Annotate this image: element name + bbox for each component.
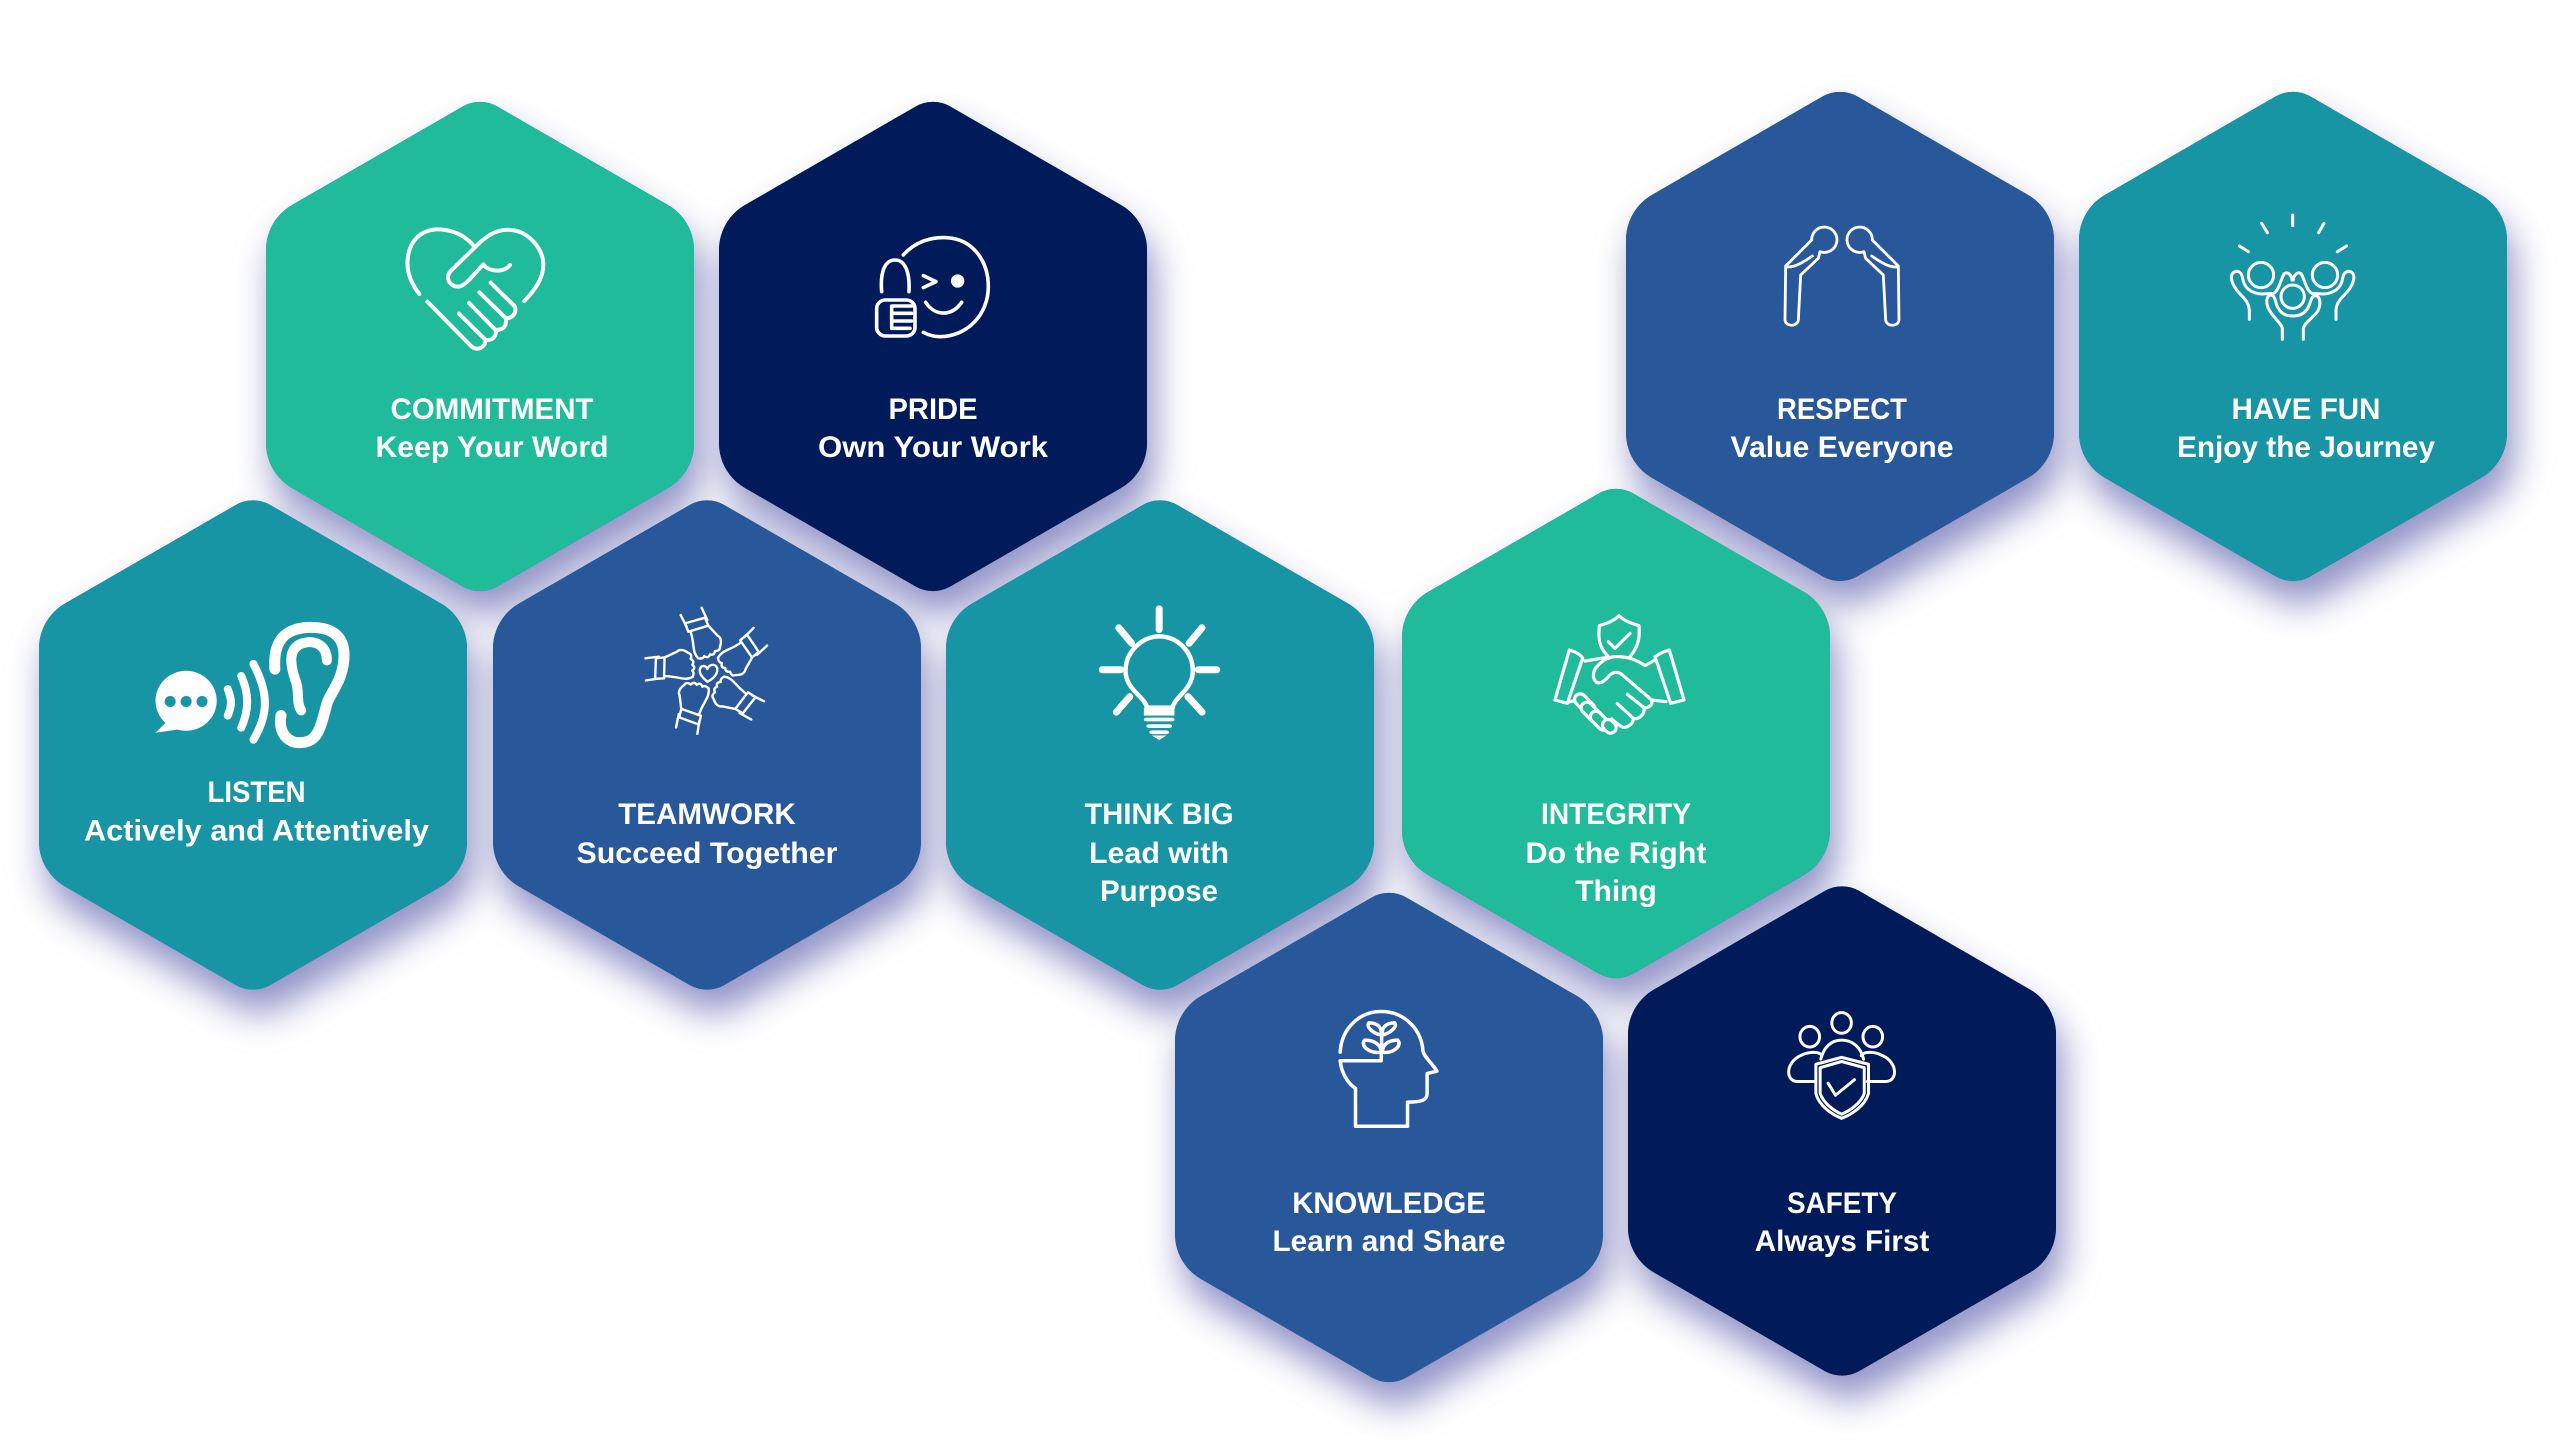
- text: think big: [1084, 798, 1234, 908]
- text: pride: [818, 393, 1048, 464]
- text: integrity: Thing: [1575, 875, 1657, 908]
- text: have fun: Enjoy the Journey: [2177, 431, 2435, 464]
- text: respect: [1730, 393, 1954, 464]
- panel: teamwork: [493, 500, 921, 990]
- icon: five hands around a heart: [639, 608, 773, 740]
- text: knowledge: KNOWLEDGE: [1292, 1187, 1486, 1220]
- text: respect: Value Everyone: [1730, 431, 1954, 464]
- text: knowledge: [1272, 1187, 1506, 1258]
- hexagon: listen: [39, 500, 467, 990]
- text: pride: Own Your Work: [818, 431, 1048, 464]
- icon: cheering people: [2231, 215, 2354, 339]
- hexagon: teamwork: [493, 500, 921, 990]
- panel: integrity: [1402, 489, 1830, 978]
- text: think big: THINK BIG: [1084, 798, 1234, 831]
- text: respect: RESPECT: [1777, 393, 1907, 426]
- text: safety: [1755, 1187, 1929, 1258]
- hexagon: commitment: [266, 102, 694, 591]
- panel: have fun: [2079, 92, 2507, 581]
- text: integrity: [1526, 798, 1706, 908]
- text: have fun: HAVE FUN: [2232, 393, 2380, 426]
- panel: respect: [1626, 92, 2054, 581]
- panel: knowledge: [1175, 893, 1603, 1382]
- icon: head with plant: [1340, 1012, 1437, 1126]
- text: think big: Lead with: [1089, 837, 1229, 870]
- icon: heart handshake: [407, 229, 543, 349]
- icon: people with shield: [1789, 1013, 1894, 1118]
- panel: commitment: [266, 102, 694, 591]
- hexagon: pride: [719, 102, 1147, 591]
- hexagon: respect: [1626, 92, 2054, 581]
- icon: winking face with thumbs up: [877, 238, 988, 337]
- text: pride: PRIDE: [888, 393, 978, 426]
- text: commitment: [376, 393, 608, 464]
- text: teamwork: [576, 798, 838, 870]
- hexagon: integrity: [1402, 489, 1830, 978]
- panel: listen: [39, 500, 467, 990]
- panel: think big: [946, 500, 1374, 990]
- text: have fun: [2177, 393, 2435, 464]
- panel: safety: [1628, 886, 2056, 1376]
- text: listen: LISTEN: [208, 776, 306, 809]
- hexagon: think big: [946, 500, 1374, 990]
- icon: light bulb: [1102, 609, 1217, 740]
- icon: two people bowing: [1785, 227, 1899, 325]
- text: knowledge: Learn and Share: [1272, 1225, 1506, 1258]
- hexagon: knowledge: [1175, 893, 1603, 1382]
- text: listen: Actively and Attentively: [84, 814, 429, 848]
- text: teamwork: TEAMWORK: [618, 798, 796, 831]
- text: safety: Always First: [1755, 1225, 1929, 1258]
- text: commitment: COMMITMENT: [390, 393, 594, 426]
- text: commitment: Keep Your Word: [376, 431, 608, 464]
- icon: speech bubble and ear: [156, 627, 344, 743]
- text: integrity: Do the Right: [1526, 837, 1706, 870]
- text: safety: SAFETY: [1787, 1187, 1897, 1220]
- text: teamwork: Succeed Together: [576, 837, 838, 870]
- text: listen: [84, 776, 429, 848]
- hexagon: safety: [1628, 886, 2056, 1376]
- text: integrity: INTEGRITY: [1541, 798, 1691, 831]
- text: think big: Purpose: [1100, 875, 1218, 908]
- icon: handshake with shield: [1555, 616, 1684, 736]
- hexagon: have fun: [2079, 92, 2507, 581]
- panel: pride: [719, 102, 1147, 591]
